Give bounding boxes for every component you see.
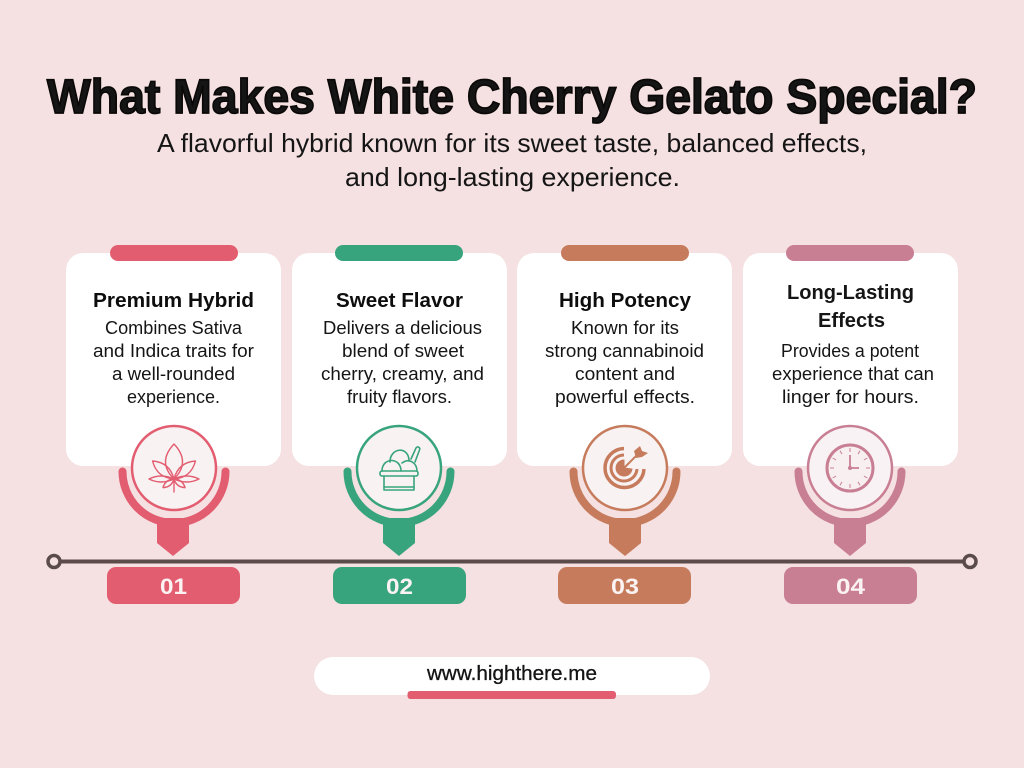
card body text: content and — [575, 363, 675, 384]
badge 03 — [558, 567, 691, 604]
marker 4: clock — [798, 426, 902, 556]
icon: ice cream cup — [380, 447, 420, 490]
card body text: blend of sweet — [342, 340, 464, 361]
icon: cannabis leaf — [149, 444, 199, 492]
subtitle: A flavorful hybrid known for its sweet taste, balanced effects, — [157, 128, 867, 158]
card heading: High Potency — [559, 289, 692, 312]
marker 2: ice cream — [348, 426, 450, 556]
card body text: cherry, creamy, and — [321, 363, 484, 384]
website url: www.highthere.me — [426, 663, 597, 685]
card heading: Effects — [818, 309, 885, 332]
icon circle — [808, 426, 892, 510]
pin cradle — [348, 472, 450, 523]
card body text — [772, 340, 934, 407]
card accent pill — [335, 245, 463, 261]
card body text: Known for its — [571, 317, 679, 338]
pin cradle — [574, 472, 676, 523]
marker 1: hybrid — [122, 426, 226, 556]
panel: long-lasting effects — [743, 245, 958, 466]
badge 02: 02 — [386, 574, 413, 599]
badge 04 — [784, 567, 917, 604]
card heading: Premium Hybrid — [93, 289, 254, 312]
card body text: linger for hours. — [782, 386, 919, 407]
panel: sweet flavor — [292, 245, 507, 466]
badge 01 — [107, 567, 240, 604]
card body text — [93, 317, 254, 407]
panel: premium hybrid — [66, 245, 281, 466]
pin cradle — [798, 472, 902, 523]
marker 3: target — [574, 426, 676, 556]
card body text: fruity flavors. — [347, 386, 452, 407]
card body text: powerful effects. — [555, 386, 695, 407]
icon: target with arrow — [605, 446, 648, 487]
footer website pill — [314, 657, 710, 695]
card heading: Sweet Flavor — [336, 289, 463, 312]
card background — [517, 253, 732, 466]
card body text: Provides a potent — [781, 340, 919, 361]
card background — [66, 253, 281, 466]
icon: clock — [827, 445, 873, 491]
card accent pill — [110, 245, 238, 261]
card background — [292, 253, 507, 466]
card body text: and Indica traits for — [93, 340, 254, 361]
badge 03: 03 — [611, 574, 639, 599]
icon circle — [132, 426, 216, 510]
card accent pill — [561, 245, 689, 261]
pin stem — [834, 518, 866, 556]
card background — [743, 253, 958, 466]
card heading — [787, 281, 914, 332]
timeline — [48, 556, 976, 568]
badge 02 — [333, 567, 466, 604]
card body text: experience. — [127, 386, 220, 407]
card accent pill — [786, 245, 914, 261]
icon circle — [357, 426, 441, 510]
pin stem — [609, 518, 641, 556]
card body text: a well-rounded — [112, 363, 235, 384]
card body text: experience that can — [772, 363, 934, 384]
footer accent bar — [408, 691, 616, 699]
title: What Makes White Cherry Gelato Special? — [47, 71, 977, 124]
badge 04: 04 — [836, 574, 866, 599]
card heading: Long-Lasting — [787, 281, 914, 304]
pin stem — [157, 518, 189, 556]
card body text: Delivers a delicious — [323, 317, 482, 338]
pin stem — [383, 518, 415, 556]
card body text — [545, 317, 704, 407]
card body text: strong cannabinoid — [545, 340, 704, 361]
pin cradle — [122, 472, 226, 523]
card body text — [321, 317, 484, 407]
badge 01: 01 — [160, 574, 187, 599]
subtitle: and long-lasting experience. — [345, 162, 680, 192]
card body text: Combines Sativa — [105, 317, 243, 338]
subtitle — [157, 128, 867, 192]
panel: high potency — [517, 245, 732, 466]
icon circle — [583, 426, 667, 510]
